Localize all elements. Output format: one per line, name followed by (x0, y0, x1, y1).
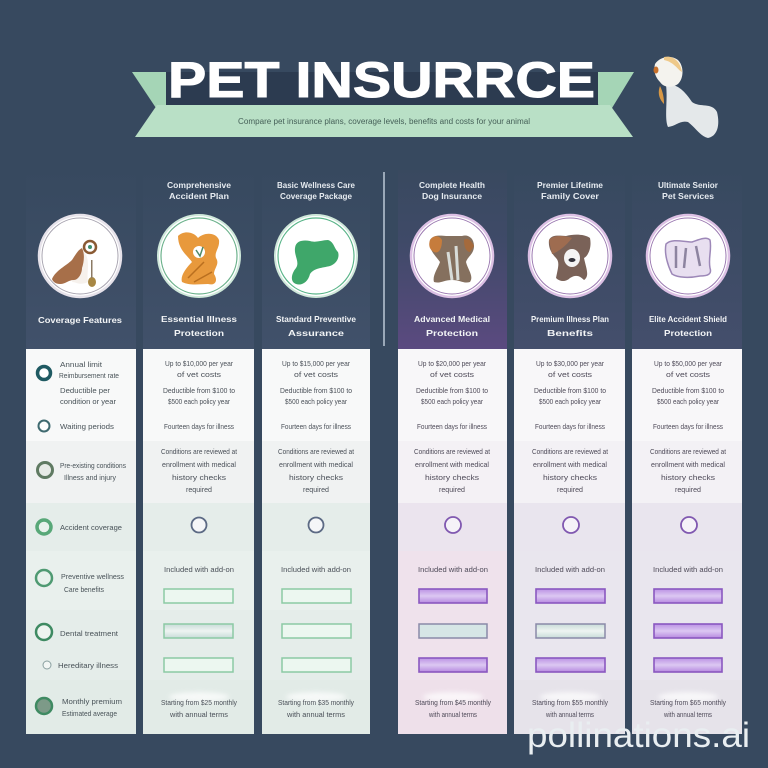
column 5 label: Premium Illness Plan (531, 314, 609, 324)
icon: green blob badge (275, 215, 357, 297)
row labels: Monthly premium (62, 697, 122, 706)
column 4 label (414, 314, 490, 338)
column 3 values (278, 359, 355, 494)
watermark: pollinations.ai (527, 716, 750, 755)
column 4 values: $500 each policy year (421, 397, 483, 406)
column 5 values: of vet costs (548, 370, 592, 379)
column 5 price note (532, 692, 608, 719)
icon: spaniel badge (529, 215, 611, 297)
column 3 header backdrop (262, 170, 370, 349)
column 5 heading: Family Cover (541, 191, 600, 201)
column 4 price note: with annual terms (428, 710, 477, 719)
column 1 header backdrop (26, 170, 136, 349)
column 6 label: Protection (664, 328, 712, 338)
row labels: Pre-existing conditions (60, 461, 126, 470)
bars (654, 589, 722, 672)
column 4 heading: Dog Insurance (422, 191, 482, 201)
column 4 values: Conditions are reviewed at (414, 447, 491, 456)
column 4 values: history checks (425, 473, 479, 482)
column 1 body rows (26, 349, 136, 441)
row labels: condition or year (60, 397, 117, 406)
column 4 plan text: Included with add-on (418, 565, 488, 574)
column 6 values: enrollment with medical (651, 460, 725, 469)
column 5 heading: Premier Lifetime (537, 180, 603, 190)
column 5 header backdrop (514, 170, 625, 349)
indicator circle (308, 518, 324, 532)
column 5 panel (514, 170, 625, 734)
column 5 plan text: Included with add-on (535, 565, 605, 574)
indicator circle (445, 517, 461, 533)
banner dark strip (166, 72, 598, 105)
row labels: Reimbursement rate (59, 371, 119, 380)
indicator circle (192, 518, 206, 532)
title banner (132, 52, 634, 137)
column 6 body rows (632, 349, 742, 441)
column 6 values: Up to $50,000 per year (654, 359, 722, 368)
column 2 label: Essential Illness (161, 314, 237, 324)
row labels (58, 360, 126, 718)
column 4 price note: Starting from $45 monthly (415, 698, 491, 707)
column 6 values: Conditions are reviewed at (650, 447, 727, 456)
column 4 values: Up to $20,000 per year (418, 359, 486, 368)
column 5 label (531, 314, 609, 338)
column 6 heading: Ultimate Senior (658, 180, 719, 190)
column 3 label (276, 314, 356, 338)
column 3 values: Deductible from $100 to (280, 386, 352, 395)
column 5 values: Deductible from $100 to (534, 386, 606, 395)
column 4 body rows (398, 349, 507, 441)
column 4 heading: Complete Health (419, 180, 485, 190)
column 4 values (414, 359, 491, 494)
column 6 heading (658, 180, 719, 201)
divider (383, 172, 385, 346)
column 5 body rows (514, 349, 625, 441)
column 4 values: Fourteen days for illness (417, 422, 487, 431)
row labels: Estimated average (62, 709, 117, 718)
column 4 values: of vet costs (430, 370, 474, 379)
column 4 values: Deductible from $100 to (416, 386, 488, 395)
bars (282, 589, 351, 672)
column 2 label (161, 314, 237, 338)
column 6 price note: Starting from $65 monthly (650, 698, 726, 707)
column 2 values: Up to $10,000 per year (165, 359, 233, 368)
column 6 heading: Pet Services (662, 191, 714, 201)
column 5 values: required (557, 485, 583, 494)
column 3 body rows (262, 349, 370, 441)
row labels: Accident coverage (60, 523, 122, 532)
column 4 values: required (439, 485, 465, 494)
banner right tail (595, 72, 634, 108)
column 3 heading: Basic Wellness Care (277, 180, 355, 190)
column 5 values (532, 359, 609, 494)
column 2 heading (167, 180, 231, 201)
subtitle: Compare pet insurance plans, coverage levels, benefits and costs for your animal (238, 117, 530, 126)
column 4 values: enrollment with medical (415, 460, 489, 469)
column 4 label: Advanced Medical (414, 314, 490, 324)
column 2 price note (161, 692, 237, 719)
column 2 panel (143, 170, 254, 734)
banner main ribbon (135, 105, 633, 137)
column 6 values: $500 each policy year (657, 397, 719, 406)
column 1 panel (26, 170, 136, 734)
column 5 price note: with annual terms (545, 710, 594, 719)
column 2 values (161, 359, 238, 494)
column 2 header backdrop (143, 170, 254, 349)
column 3 price note (278, 692, 354, 719)
column 2 heading: Comprehensive (167, 180, 231, 190)
row icons (36, 366, 52, 714)
column 6 values: of vet costs (666, 370, 710, 379)
column 2 body rows (143, 349, 254, 441)
column 2 price note: Starting from $25 monthly (161, 698, 237, 707)
column 2 values: history checks (172, 473, 226, 482)
column 3 label: Standard Preventive (276, 314, 356, 324)
title: PET INSURRCE (168, 52, 595, 108)
icon: brown dog badge (411, 215, 493, 297)
indicator circle (563, 517, 579, 533)
column 5 heading (537, 180, 603, 201)
column 5 values: Fourteen days for illness (535, 422, 605, 431)
column 5 values: history checks (543, 473, 597, 482)
column 5 values: $500 each policy year (539, 397, 601, 406)
column 2 values: Fourteen days for illness (164, 422, 234, 431)
column 2 plan text: Included with add-on (164, 565, 234, 574)
row labels: Care benefits (64, 585, 104, 594)
column 2 label: Protection (174, 328, 224, 338)
column 6 header backdrop (632, 170, 742, 349)
column 4 header backdrop (398, 170, 507, 349)
column 6 values: required (675, 485, 701, 494)
bars (164, 589, 233, 672)
indicator circle (681, 517, 697, 533)
column 6 plan text: Included with add-on (653, 565, 723, 574)
column 2 heading: Accident Plan (169, 191, 229, 201)
column 6 price note (650, 692, 726, 719)
column 6 values: Deductible from $100 to (652, 386, 724, 395)
column 2 values: $500 each policy year (168, 397, 230, 406)
row labels: Deductible per (60, 386, 111, 395)
row labels: Illness and injury (64, 473, 116, 482)
column 3 label: Assurance (288, 328, 344, 338)
column 5 price note: Starting from $55 monthly (532, 698, 608, 707)
column 4 label: Protection (426, 328, 478, 338)
row labels: Waiting periods (60, 422, 114, 431)
column 6 price note: with annual terms (663, 710, 712, 719)
column 3 heading: Coverage Package (280, 191, 352, 201)
column 3 price note: Starting from $35 monthly (278, 698, 354, 707)
bars (419, 589, 487, 672)
column 6 values (650, 359, 727, 494)
column 5 values: Up to $30,000 per year (536, 359, 604, 368)
column 4 price note (415, 692, 491, 719)
row labels: Dental treatment (60, 629, 119, 638)
column 2 values: of vet costs (177, 370, 221, 379)
column 5 label: Benefits (547, 328, 593, 338)
column 3 values: history checks (289, 473, 343, 482)
row labels: Annual limit (60, 360, 103, 369)
bars (536, 589, 605, 672)
row labels: Preventive wellness (61, 572, 124, 581)
column 6 label: Elite Accident Shield (649, 314, 727, 324)
icon: white dog (654, 57, 718, 138)
column 2 values: enrollment with medical (162, 460, 236, 469)
row labels: Hereditary illness (58, 661, 118, 670)
icon: orange pet badge (158, 215, 240, 297)
column 6 values: Fourteen days for illness (653, 422, 723, 431)
column 3 panel (262, 170, 370, 734)
column 4 heading (419, 180, 485, 201)
column 2 price note: with annual terms (169, 710, 228, 719)
banner left tail (132, 72, 170, 108)
column 2 values: Deductible from $100 to (163, 386, 235, 395)
column 4 panel (398, 170, 507, 734)
column 3 values: of vet costs (294, 370, 338, 379)
column 3 values: enrollment with medical (279, 460, 353, 469)
column 3 values: $500 each policy year (285, 397, 347, 406)
column 3 values: required (303, 485, 329, 494)
column 3 values: Fourteen days for illness (281, 422, 351, 431)
icon: dog badge (39, 215, 121, 297)
column 6 panel (632, 170, 742, 734)
column 3 heading (277, 180, 355, 201)
column 2 values: required (186, 485, 212, 494)
column 5 values: Conditions are reviewed at (532, 447, 609, 456)
column 3 price note: with annual terms (286, 710, 345, 719)
column 6 label (649, 314, 727, 338)
column 3 values: Conditions are reviewed at (278, 447, 355, 456)
column 3 plan text: Included with add-on (281, 565, 351, 574)
column 2 values: Conditions are reviewed at (161, 447, 238, 456)
column 5 values: enrollment with medical (533, 460, 607, 469)
column 3 values: Up to $15,000 per year (282, 359, 350, 368)
column 6 values: history checks (661, 473, 715, 482)
icon: lilac pet badge (647, 215, 729, 297)
column 1 label: Coverage Features (38, 315, 122, 325)
